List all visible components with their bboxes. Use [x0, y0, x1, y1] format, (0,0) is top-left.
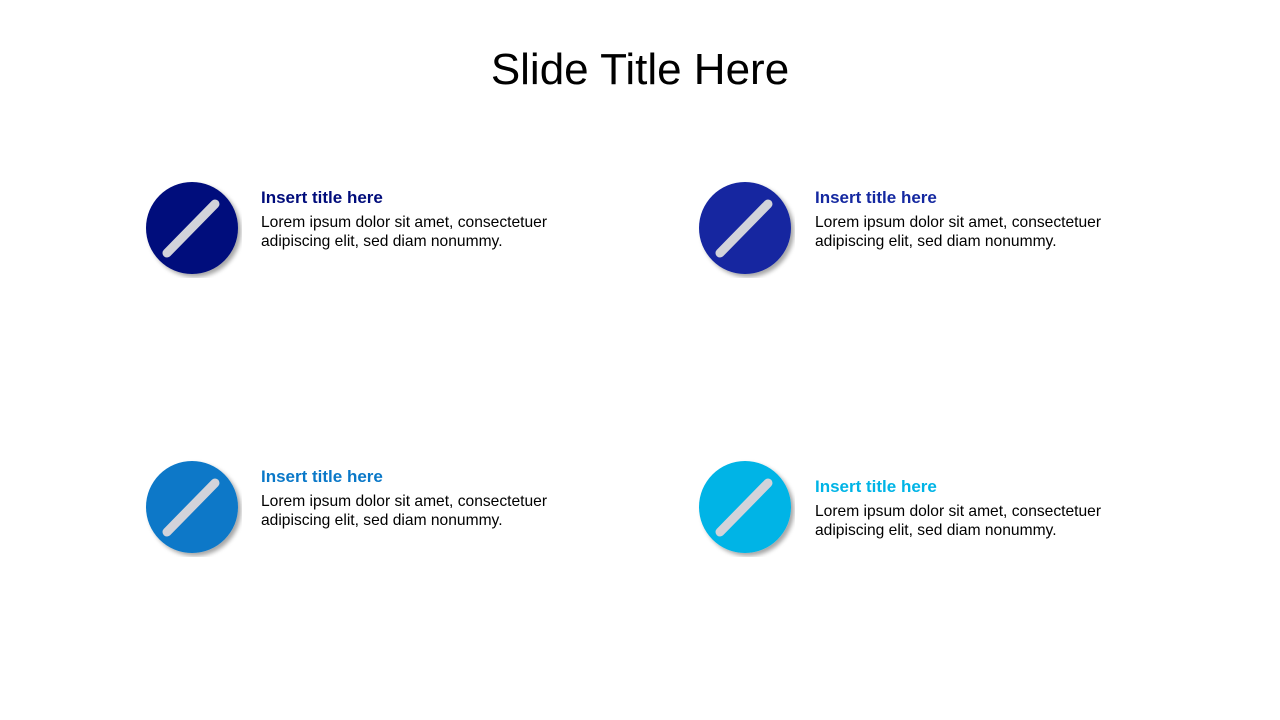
text block 2: Lorem ipsum dolor sit amet, consectetuer [815, 214, 1101, 231]
text block 1: Insert title here [261, 188, 383, 207]
text block 1: Lorem ipsum dolor sit amet, consectetuer [261, 214, 547, 231]
icon: circle 1 [146, 182, 242, 278]
text block 3: Lorem ipsum dolor sit amet, consectetuer [261, 493, 547, 510]
text block 2: adipiscing elit, sed diam nonummy. [815, 233, 1057, 250]
text block 1: adipiscing elit, sed diam nonummy. [261, 233, 503, 250]
text block 4: Lorem ipsum dolor sit amet, consectetuer [815, 503, 1101, 520]
text block 2 [815, 188, 1101, 250]
text block 1 [261, 188, 547, 250]
icon: circle 3 [146, 461, 242, 557]
text block 3: adipiscing elit, sed diam nonummy. [261, 512, 503, 529]
icon: circle 2 [699, 182, 795, 278]
text block 4: adipiscing elit, sed diam nonummy. [815, 522, 1057, 539]
text block 2: Insert title here [815, 188, 937, 207]
icon: circle 4 [699, 461, 795, 557]
text block 3 [261, 467, 547, 529]
text block 4 [815, 477, 1101, 539]
text block 3: Insert title here [261, 467, 383, 486]
title: Slide Title Here [491, 45, 789, 94]
text block 4: Insert title here [815, 477, 937, 496]
